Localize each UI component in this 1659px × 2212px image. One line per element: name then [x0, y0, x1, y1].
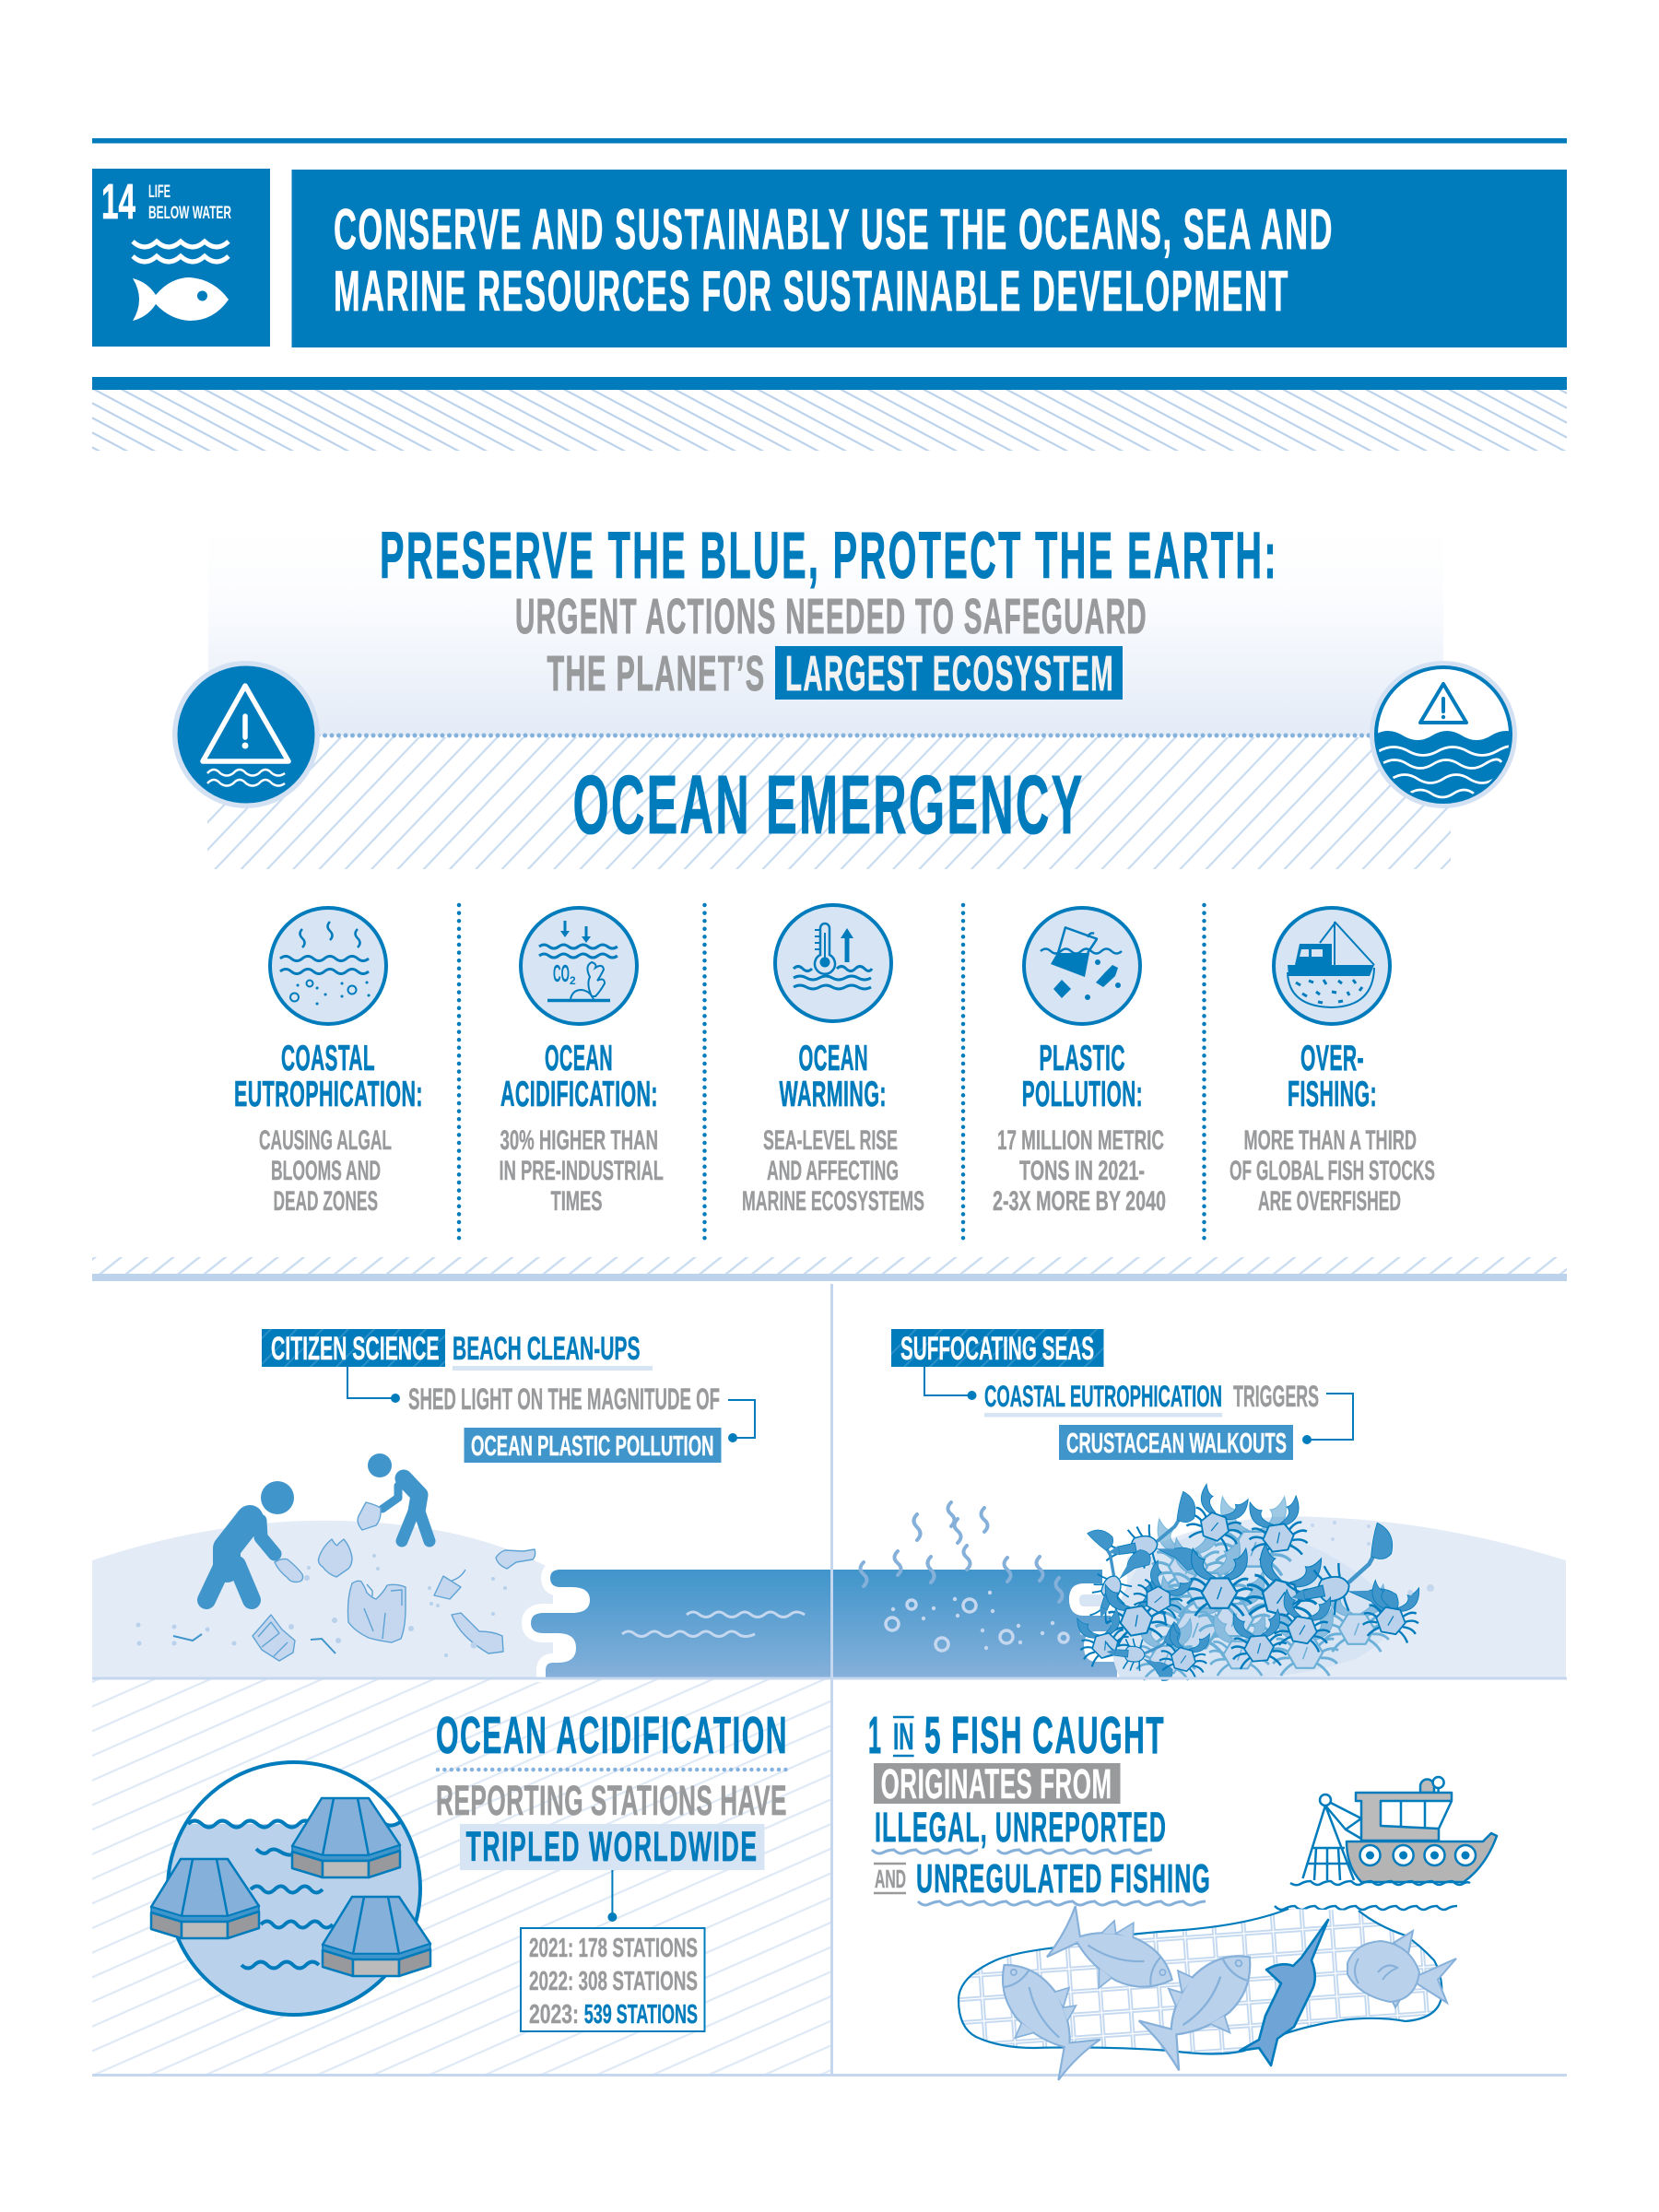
highlight: largest ecosystem [775, 646, 1123, 701]
fish: tuna left [975, 1942, 1110, 2085]
callout: crustacean walkouts [1059, 1425, 1293, 1460]
heading: OCEAN [798, 1039, 868, 1078]
panel: coastal eutrophication [234, 908, 423, 1217]
description [500, 1125, 664, 1217]
panel: suffocating seas [831, 1329, 1566, 1682]
callout: citizen science: CITIZEN SCIENCE [271, 1331, 439, 1367]
highlight: originates from [874, 1760, 1121, 1807]
heading: POLLUTION: [1022, 1075, 1143, 1114]
crabs and lobsters [1061, 1482, 1424, 1682]
heading: ACIDIFICATION: [500, 1075, 658, 1114]
text: illegal unreported: ILLEGAL, UNREPORTED [875, 1804, 1167, 1851]
description: MARINE ECOSYSTEMS [742, 1186, 924, 1217]
beach [92, 1521, 553, 1677]
beach right [1127, 1516, 1566, 1677]
subheading: REPORTING STATIONS HAVE [436, 1777, 787, 1824]
bubbles [886, 1591, 1084, 1651]
description [259, 1125, 392, 1217]
description [1230, 1125, 1435, 1217]
heading: WARMING: [780, 1075, 887, 1114]
icon: eutrophication [270, 908, 386, 1024]
badge number: 14 [101, 174, 135, 229]
station counts table: 539 STATIONS [584, 2000, 698, 2030]
connector [924, 1367, 977, 1400]
badge label [148, 182, 231, 223]
heading [234, 1039, 423, 1114]
panel: illegal fishing [868, 1706, 1497, 2085]
highlight: originates from: ORIGINATES FROM [881, 1760, 1112, 1807]
beach clean-ups label: BEACH CLEAN-UPS [453, 1331, 640, 1367]
ocean emergency title: OCEAN EMERGENCY [573, 759, 1084, 852]
heading: OCEAN ACIDIFICATION [436, 1706, 788, 1765]
beach clean-ups label [453, 1331, 653, 1371]
column dividers [459, 905, 1204, 1239]
heading: COASTAL [281, 1039, 375, 1078]
station counts table: 2023: [529, 2000, 579, 2030]
plastic litter [253, 1502, 535, 1661]
description [742, 1125, 924, 1217]
heading: 1 in 5: 5 FISH CAUGHT [924, 1706, 1165, 1765]
icon: waves [133, 241, 229, 262]
description: AND AFFECTING [767, 1156, 899, 1186]
connector [607, 1870, 617, 1922]
swarm shadow [1112, 1528, 1392, 1678]
sand specks [1311, 1521, 1434, 1595]
heading [1022, 1039, 1143, 1114]
water right [831, 1570, 1127, 1677]
coastal eutrophication label: COASTAL EUTROPHICATION [984, 1380, 1222, 1413]
panel: plastic pollution [993, 908, 1166, 1217]
litter: straws and sand specks [136, 1554, 507, 1657]
panel: ocean acidification stations [151, 1706, 788, 2031]
station counts table: 2021: 178 STATIONS [529, 1934, 698, 1963]
heading [500, 1039, 658, 1114]
heading: 1 in 5: IN [893, 1715, 914, 1758]
goal banner [291, 170, 1567, 347]
steam plumes [861, 1502, 1062, 1602]
heading: PLASTIC [1040, 1039, 1125, 1078]
person: collector right [368, 1453, 429, 1541]
heading: 1 in 5: 1 [868, 1706, 881, 1765]
panel: beach clean-ups [92, 1329, 839, 1682]
description [993, 1125, 1166, 1217]
panel: ocean acidification [500, 908, 664, 1217]
highlight: largest ecosystem: LARGEST ECOSYSTEM [785, 646, 1114, 701]
callout: suffocating seas [891, 1329, 1104, 1367]
connector [1302, 1394, 1353, 1444]
text: and unregulated fishing: UNREGULATED FISHING [916, 1856, 1211, 1901]
top rule [92, 138, 1567, 144]
panel: ocean emergency headline [172, 520, 1521, 869]
description: DEAD ZONES [273, 1186, 378, 1217]
subtitle line 2: THE PLANET’S [547, 646, 765, 701]
badge label: BELOW WATER [148, 204, 231, 223]
description: 30% HIGHER THAN [500, 1125, 658, 1156]
text: triggers: TRIGGERS [1233, 1380, 1319, 1413]
connector [728, 1400, 755, 1442]
icon: acidification: CO [553, 959, 570, 987]
icon: acidification: 2 [570, 974, 576, 987]
callout: ocean plastic pollution: OCEAN PLASTIC POLLUTION [471, 1430, 713, 1462]
fish: tuna top [1044, 1897, 1187, 2014]
description: TONS IN 2021- [1019, 1156, 1145, 1186]
banner heading [334, 197, 1334, 324]
fish: pompano [1347, 1931, 1456, 2007]
faded crabs [1135, 1497, 1390, 1680]
illustration: fishing net with catch [959, 1897, 1457, 2085]
heading: 1 in 5 [868, 1706, 1165, 1765]
connector [347, 1367, 400, 1403]
badge label: LIFE [148, 182, 171, 202]
description: 2-3X MORE BY 2040 [993, 1186, 1166, 1217]
icon: warming [775, 905, 891, 1021]
description: TIMES [551, 1186, 603, 1217]
SDG 14 badge [92, 169, 270, 347]
icon: acidification [521, 908, 637, 1024]
callout: crustacean walkouts: CRUSTACEAN WALKOUTS [1066, 1427, 1287, 1459]
icon: plastic [1024, 908, 1140, 1024]
callout: citizen science [262, 1329, 445, 1367]
icon: warning triangle [172, 661, 320, 808]
heading: FISHING: [1288, 1075, 1377, 1114]
icon: rising water warning [1370, 661, 1521, 811]
description: SEA-LEVEL RISE [763, 1125, 898, 1156]
highlight: tripled worldwide: TRIPLED WORLDWIDE [466, 1823, 759, 1870]
text: and unregulated fishing: AND [875, 1865, 906, 1893]
heading [780, 1039, 887, 1114]
description: BLOOMS AND [271, 1156, 381, 1186]
header band [92, 377, 1567, 390]
callout: suffocating seas: SUFFOCATING SEAS [900, 1331, 1094, 1367]
fish: swordfish [1240, 1920, 1328, 2065]
station counts table [521, 1928, 704, 2031]
panel: overfishing [1230, 908, 1435, 1217]
station counts table: 2022: 308 STATIONS [529, 1967, 698, 1996]
description: MORE THAN A THIRD [1244, 1125, 1417, 1156]
description: IN PRE-INDUSTRIAL [500, 1156, 664, 1186]
panel: ocean warming [742, 905, 924, 1217]
illustration: fishing boat [1290, 1777, 1497, 1885]
water left [531, 1570, 839, 1682]
illustration: monitoring buoys [151, 1762, 433, 2028]
highlight: tripled worldwide [460, 1823, 765, 1870]
text: and unregulated fishing [874, 1856, 1211, 1905]
text: shed light: SHED LIGHT ON THE MAGNITUDE OF [408, 1382, 720, 1416]
person: collector left [206, 1481, 294, 1600]
text: illegal unreported [872, 1804, 1167, 1853]
callout: ocean plastic pollution [465, 1428, 721, 1463]
description: 17 MILLION METRIC [997, 1125, 1164, 1156]
description: ARE OVERFISHED [1258, 1186, 1401, 1217]
heading: EUTROPHICATION: [234, 1075, 423, 1114]
icon: fish [133, 277, 229, 321]
icon: fishing boat [1274, 908, 1390, 1024]
coastal eutrophication label [984, 1380, 1222, 1418]
heading: OCEAN [545, 1039, 613, 1078]
subtitle line 1: URGENT ACTIONS NEEDED TO SAFEGUARD [515, 589, 1147, 644]
description: CAUSING ALGAL [259, 1125, 392, 1156]
heading: OVER- [1300, 1039, 1364, 1078]
crustacean swarm [1061, 1482, 1424, 1682]
description: OF GLOBAL FISH STOCKS [1230, 1156, 1435, 1186]
fish: tuna centre [1129, 1928, 1277, 2077]
heading [1288, 1039, 1377, 1114]
